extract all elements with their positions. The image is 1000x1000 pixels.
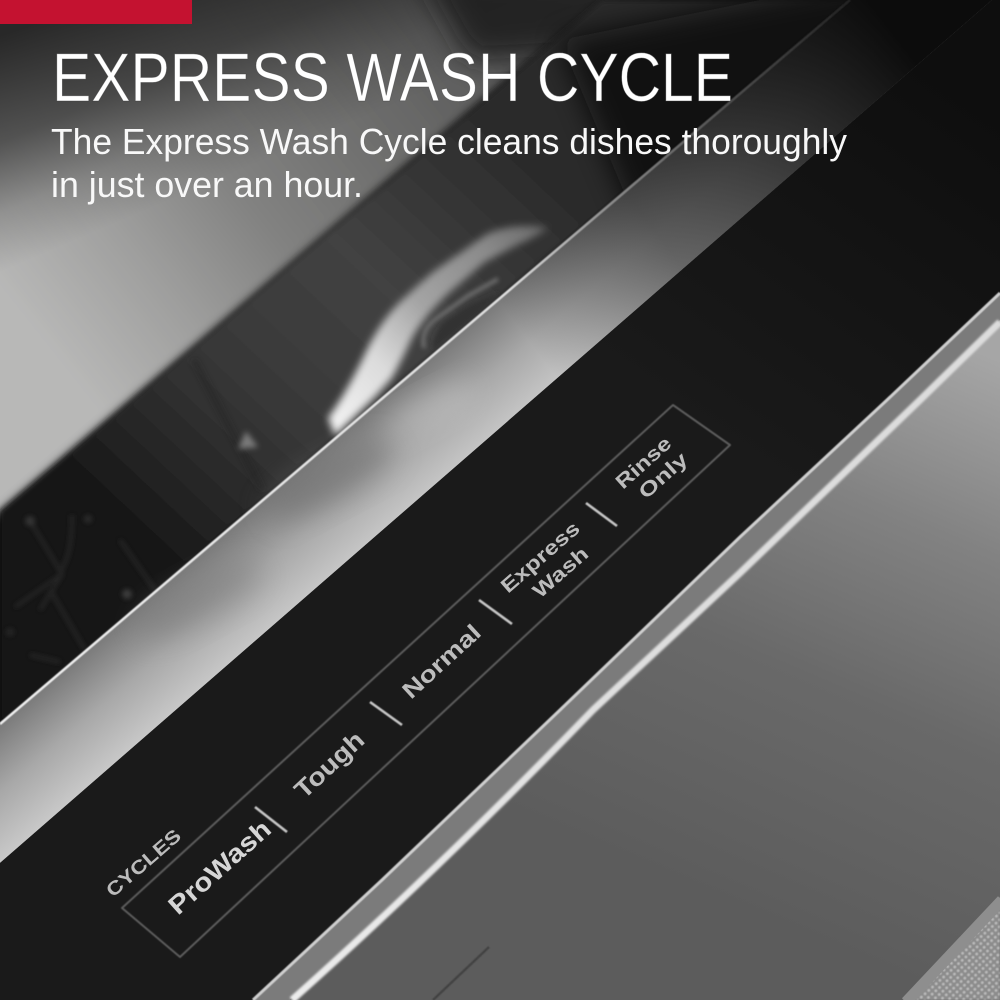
option: Express Wash: Express (497, 518, 584, 598)
divider 3 (479, 600, 512, 624)
divider 2 (370, 702, 402, 725)
red accent bar (0, 0, 192, 24)
panel: dark tub interior (0, 0, 900, 724)
cycles outline (122, 405, 730, 957)
control panel: cycles label box and options (103, 405, 730, 957)
shading: top of light panel (0, 0, 640, 400)
option: Normal: Normal (397, 619, 486, 704)
option: Rinse Only (612, 433, 693, 504)
panel: grey channel below strip (253, 293, 1000, 1000)
divider 4 (586, 503, 617, 526)
shading: top-right of light panel (420, 0, 680, 60)
highlight line: strip edge (253, 293, 1000, 1000)
panel: textured corner at bottom right (903, 897, 1000, 1000)
icon: dish rack wires (6, 515, 155, 662)
subtitle text: in just over an hour. (51, 164, 363, 205)
highlight line: lower trim (292, 322, 1000, 1000)
title: EXPRESS WASH CYCLE (52, 39, 733, 116)
option: Rinse Only: Rinse (612, 433, 676, 494)
panel: blurred light upper door interior (0, 0, 640, 540)
icon: faint triangular glint (238, 431, 258, 449)
option: Tough: Tough (289, 726, 370, 804)
option: ProWash: ProWash (162, 814, 277, 920)
option: Rinse Only: Only (635, 448, 693, 504)
highlight line on door edge (0, 0, 850, 724)
door notch line (433, 947, 489, 1000)
option: Express Wash: Wash (529, 543, 593, 603)
panel: stainless steel door front (290, 320, 1000, 1000)
option: Express Wash (497, 518, 593, 603)
divider 1 (255, 807, 287, 832)
label: CYCLES: CYCLES (103, 826, 186, 902)
subtitle text (51, 121, 847, 205)
icon: curved sink-like highlight (328, 226, 548, 436)
subtitle text: The Express Wash Cycle cleans dishes thoroughly (51, 121, 847, 162)
